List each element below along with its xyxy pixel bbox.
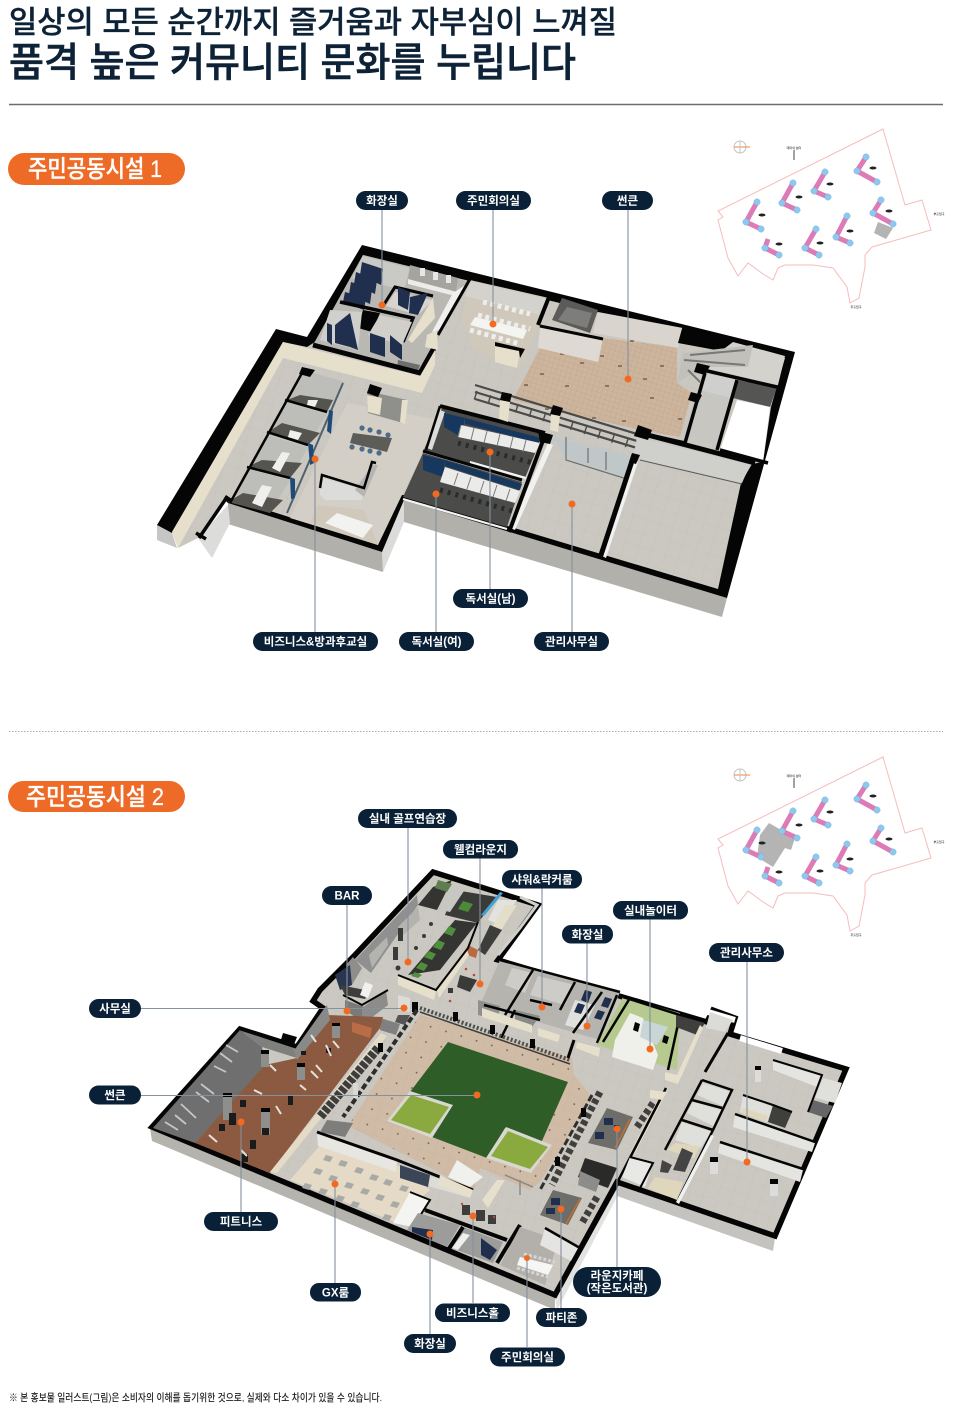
site map 1 [718,129,945,309]
label: 실내 골프연습장: 실내 골프연습장 [369,812,447,826]
title: 품격 높은 커뮤니티 문화를 누립니다 [9,41,576,85]
label: 썬큰: 썬큰 [617,194,638,208]
label: GX룸 [310,1283,361,1302]
label: 화장실 [562,925,613,944]
offices: business & after-school rooms [228,367,345,513]
label: 샤워&락커룸 [502,870,582,888]
bar and office [335,957,410,1038]
dots and labels [253,191,653,651]
building slab [157,245,795,598]
label: 화장실 [356,191,408,210]
label: BAR: BAR [335,890,360,902]
golf and welcome lounge [355,880,537,1002]
label: 주민회의실: 주민회의실 [501,1350,554,1364]
fence and pillars [475,385,637,448]
label: 썬큰: 썬큰 [104,1089,126,1102]
label: 독서실(여): 독서실(여) [412,634,462,648]
restrooms [313,255,470,373]
label: 화장실: 화장실 [572,928,603,942]
floor plan 2 [89,809,846,1366]
dots and labels [89,809,784,1366]
label: 비즈니스&방과후교실 [253,632,378,651]
label: 웰컴라운지: 웰컴라운지 [454,842,507,856]
outer side faces [157,500,727,617]
label: 독서실(남) [453,589,528,608]
lounge cafe and party zone [540,1033,728,1295]
label: GX룸: GX룸 [322,1286,350,1300]
label: 피트니스: 피트니스 [220,1216,263,1228]
label: 피트니스 [204,1212,278,1231]
conference room [425,279,549,368]
label: 비즈니스홀: 비즈니스홀 [446,1306,499,1320]
site map 1: 부출입구 [933,211,945,216]
cream partition walls [172,342,435,548]
label: 파티존: 파티존 [546,1312,578,1324]
label: 샤워&락커룸: 샤워&락커룸 [511,874,573,886]
footnote: ※ 본 홍보물 일러스트(그림)은 소비자의 이해를 돕기위한 것으로, 실제와 다소 차이가 있을 수 있습니다. [9,1391,382,1404]
label: 비즈니스&방과후교실: 비즈니스&방과후교실 [264,634,367,648]
floor plan 1 [157,191,795,651]
label: 썬큰 [602,191,653,210]
site map 2 [718,757,945,937]
title: 일상의 모든 순간까지 즐거움과 자부심이 느껴질 [9,5,617,40]
label: 사무실 [89,999,141,1018]
heading: 주민공동시설 2: 주민공동시설 2 [26,784,164,811]
label: 웰컴라운지 [443,840,518,858]
label: 주민회의실 [456,191,531,210]
indoor playground [597,997,733,1084]
site map 1: 테마의 쉼터 [787,145,802,150]
upper right rooms and void [640,363,777,463]
building slab [152,872,846,1295]
label: 파티존 [536,1308,587,1327]
label: 화장실 [404,1334,456,1353]
label: 비즈니스홀 [435,1304,510,1322]
lower rooms [407,1175,580,1285]
label: 사무실: 사무실 [99,1002,131,1016]
site map 2: 테마의 쉼터 [787,773,802,778]
outer side faces [150,1128,775,1310]
label: 독서실(남): 독서실(남) [466,592,516,606]
heading: 주민공동시설 1: 주민공동시설 1 [28,156,162,183]
label: 라운지카페 (작은도서관) [573,1267,661,1297]
label: 독서실(여) [399,632,474,651]
shower rooms [478,960,620,1057]
label: 실내 골프연습장 [358,809,457,828]
glass edges in the right wing [708,1012,782,1051]
site map 2: 주출입구 [850,932,862,937]
management office [509,425,755,558]
label: 관리사무소 [709,943,784,962]
label: 라운지카페 (작은도서관): (작은도서관) [587,1282,647,1295]
label: 실내놀이터: 실내놀이터 [624,904,677,918]
fitness [153,1005,417,1173]
GX room [290,1120,483,1227]
label: 관리사무실 [534,632,609,651]
reading rooms [403,406,545,529]
management rooms [622,1060,842,1204]
sunken terrace [513,298,785,437]
lounge [290,384,440,545]
label: 관리사무실: 관리사무실 [545,636,598,648]
label: BAR [322,886,372,905]
site map 2: 부출입구 [933,839,945,844]
label: 화장실: 화장실 [366,194,398,208]
label: 실내놀이터 [613,901,688,920]
label: 주민회의실: 주민회의실 [467,194,520,208]
label: 화장실: 화장실 [414,1336,446,1350]
site map 1: 주출입구 [850,304,862,309]
courtyard [348,1002,592,1190]
title [9,5,617,85]
label: 주민회의실 [490,1348,565,1366]
label: 썬큰 [89,1086,141,1104]
label: 라운지카페 (작은도서관): 라운지카페 [591,1268,643,1282]
label: 관리사무소: 관리사무소 [720,946,773,960]
